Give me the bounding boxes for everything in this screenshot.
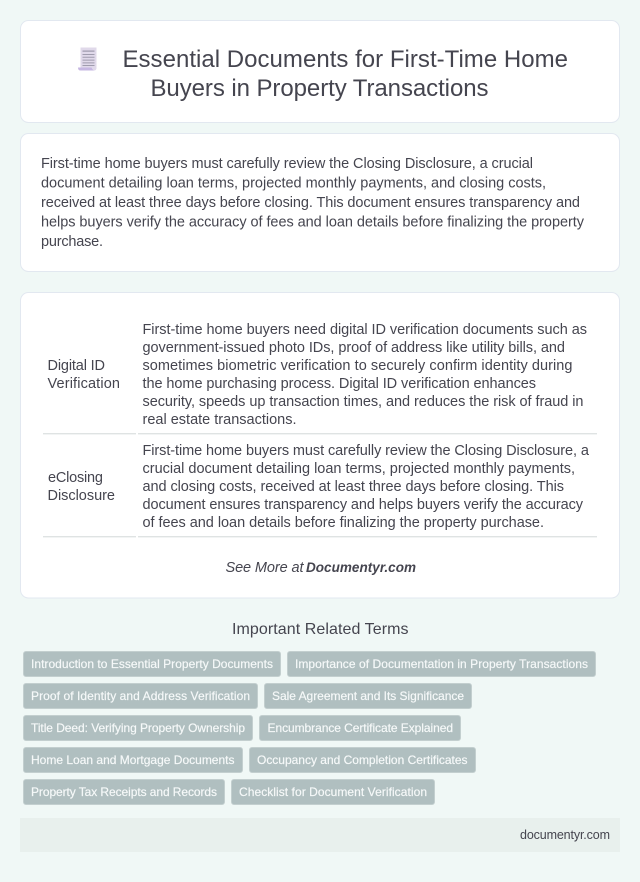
tag	[250, 748, 476, 772]
description: Digital ID Verification	[142, 322, 587, 428]
intro paragraph: First-time home buyers must carefully review the Closing Disclosure, a crucial	[41, 156, 533, 172]
tag	[264, 684, 472, 708]
term: Digital ID Verification	[48, 358, 120, 392]
link: see more: Documentyr.com	[306, 560, 416, 575]
description: Digital ID Verification: security, speeds up transaction times, and reduces the risk of fraud in	[142, 394, 584, 410]
title	[122, 46, 568, 102]
heading: important related terms: Important Related Terms	[232, 621, 408, 638]
tag	[288, 652, 596, 676]
icon: document scroll	[78, 48, 96, 70]
description: Digital ID Verification: government-issued photo IDs, proof of address like utility bills, and	[142, 340, 565, 356]
intro paragraph: received at least three days before closing. This document ensures transparency and	[41, 195, 580, 211]
footer domain: documentyr.com	[520, 828, 610, 842]
intro paragraph: purchase.	[41, 234, 103, 250]
description: Digital ID Verification: real estate transactions.	[142, 412, 296, 428]
term: eClosing Disclosure: eClosing	[48, 470, 103, 486]
description: eClosing Disclosure: First-time home buyers must carefully review the Closing Disclosure, a	[142, 443, 590, 459]
intro paragraph	[41, 156, 585, 250]
tag	[24, 780, 224, 804]
description: Digital ID Verification: First-time home buyers need digital ID verification documents such as	[142, 322, 587, 338]
tag: Property Tax Receipts and Records	[31, 785, 217, 799]
description: eClosing Disclosure: of fees and loan details before finalizing the property purchase.	[142, 515, 544, 531]
tag	[24, 748, 242, 772]
row: Digital ID Verification	[48, 322, 587, 428]
description: Digital ID Verification: sometimes biometric verification to securely confirm identity during	[142, 358, 572, 374]
link: see more	[226, 560, 416, 576]
tag: Sale Agreement and Its Significance	[272, 689, 464, 703]
footer bar	[20, 818, 620, 852]
term: eClosing Disclosure: Disclosure	[48, 488, 115, 504]
panel: title card	[20, 20, 620, 122]
tag: Occupancy and Completion Certificates	[257, 753, 468, 767]
link: see more: See More at	[226, 560, 304, 576]
title: Buyers in Property Transactions	[150, 75, 488, 102]
tag: Title Deed: Verifying Property Ownership	[31, 721, 245, 735]
tag: Importance of Documentation in Property Transactions	[295, 657, 588, 671]
description: eClosing Disclosure: document ensures transparency and helps buyers verify the accuracy	[142, 497, 584, 513]
panel: related terms tags	[24, 652, 596, 804]
tag: Introduction to Essential Property Documents	[31, 657, 273, 671]
tag: Encumbrance Certificate Explained	[268, 721, 453, 735]
tag	[24, 684, 258, 708]
description: eClosing Disclosure: crucial document detailing loan terms, projected monthly payments,	[142, 461, 575, 477]
description: eClosing Disclosure	[142, 443, 590, 531]
tag	[24, 716, 252, 740]
tag: Checklist for Document Verification	[239, 785, 427, 799]
tag	[232, 780, 434, 804]
description: Digital ID Verification: the home purchasing process. Digital ID verification enhances	[142, 376, 536, 392]
intro paragraph: helps buyers verify the accuracy of fees and loan details before finalizing the property	[41, 214, 585, 230]
tag: Home Loan and Mortgage Documents	[31, 753, 234, 767]
intro paragraph: document detailing loan terms, projected monthly payments, and closing costs,	[41, 176, 546, 192]
panel: introduction text	[20, 134, 620, 272]
row: eClosing Disclosure	[48, 443, 590, 531]
title: Essential Documents for First-Time Home	[122, 46, 568, 73]
term: Digital ID Verification: Digital ID	[48, 358, 105, 374]
term: Digital ID Verification: Verification	[48, 376, 120, 392]
tag	[260, 716, 460, 740]
description: eClosing Disclosure: and closing costs, received at least three days before closing. This	[142, 479, 564, 495]
term: eClosing Disclosure	[48, 470, 115, 504]
panel: document table	[20, 292, 620, 598]
tag	[24, 652, 280, 676]
tag: Proof of Identity and Address Verification	[31, 689, 250, 703]
